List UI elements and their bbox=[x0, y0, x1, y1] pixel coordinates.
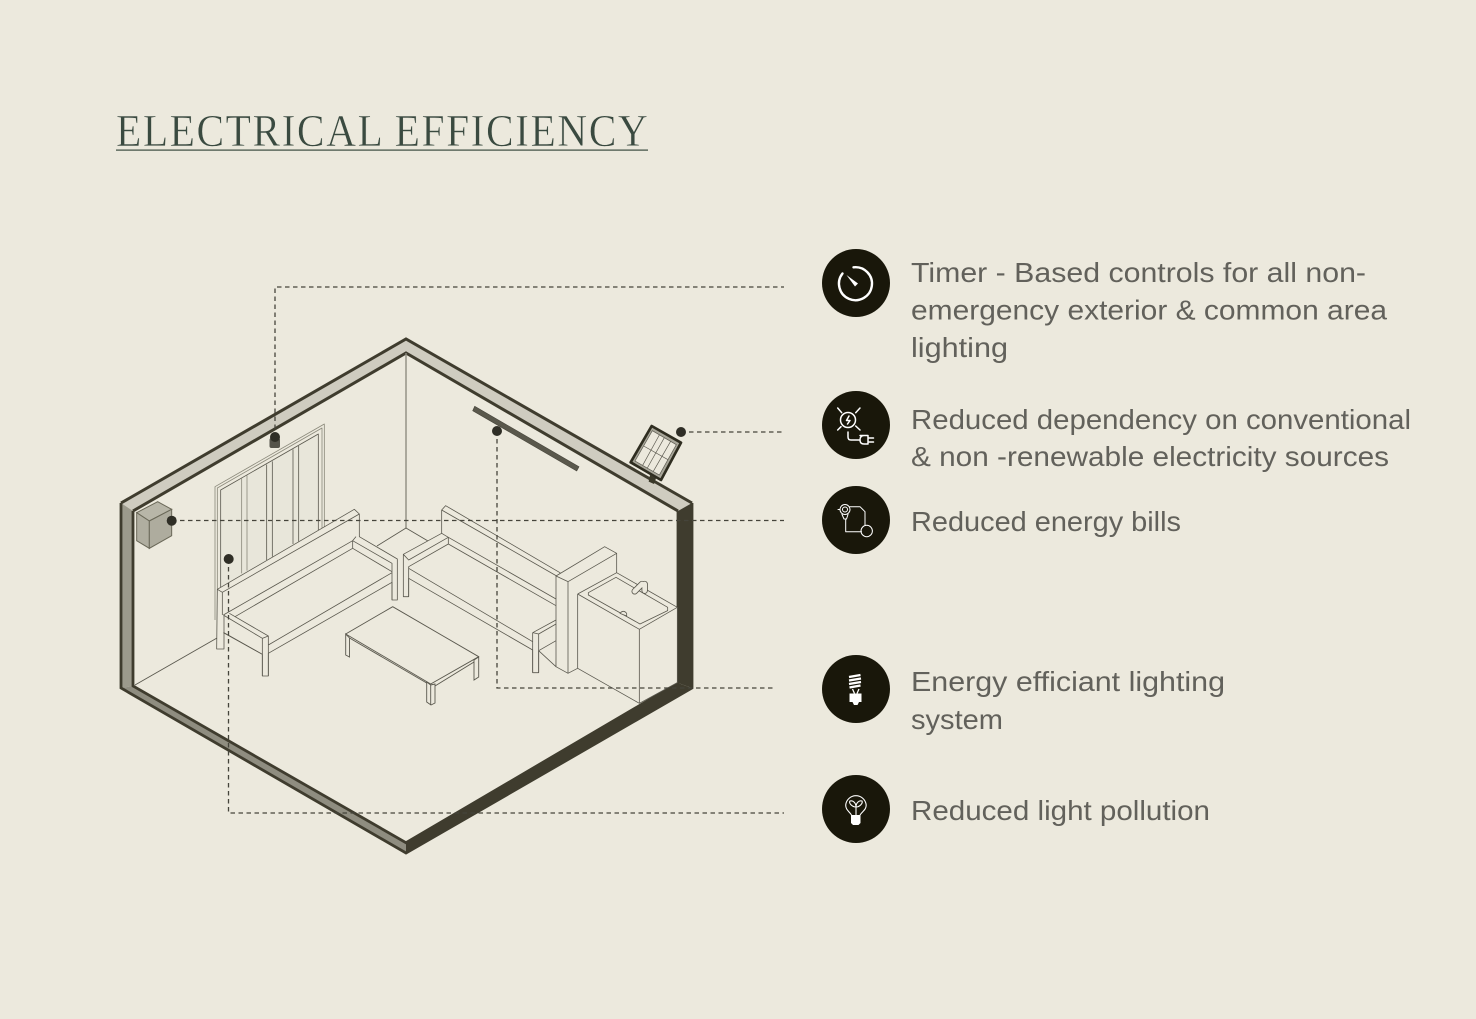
icon: sun and plug bbox=[822, 391, 890, 459]
icon: energy bill bbox=[822, 486, 890, 554]
icon: timer bbox=[822, 249, 890, 317]
kitchen counter with sink bbox=[556, 547, 677, 703]
text: reduced dependency: Reduced dependency on conventional bbox=[911, 404, 1411, 435]
text: timer controls: Timer - Based controls for all non- bbox=[911, 257, 1366, 288]
icon: eco light bulb bbox=[822, 775, 890, 843]
text: timer controls: lighting bbox=[911, 332, 1008, 363]
icon: compact fluorescent bulb bbox=[822, 655, 890, 723]
text: reduced dependency bbox=[911, 404, 1411, 472]
isometric room illustration bbox=[121, 339, 692, 853]
right sofa bbox=[403, 506, 560, 673]
text: lighting system bbox=[911, 666, 1225, 735]
text: timer controls: emergency exterior & common area bbox=[911, 294, 1387, 326]
callout leader lines bbox=[167, 287, 784, 813]
door with glazed panels bbox=[215, 424, 324, 620]
room walls bbox=[121, 339, 692, 853]
text: lighting system: Energy efficiant lighting bbox=[911, 666, 1225, 697]
title: ELECTRICAL EFFICIENCY bbox=[116, 106, 648, 156]
text: reduced light pollution: Reduced light pollution bbox=[911, 795, 1210, 826]
text: timer controls bbox=[911, 257, 1387, 363]
timer device on wall bbox=[270, 438, 280, 448]
electrical box bbox=[137, 502, 172, 548]
text: lighting system: system bbox=[911, 704, 1003, 735]
coffee table bbox=[346, 607, 479, 705]
track light bbox=[473, 406, 579, 471]
left sofa bbox=[217, 509, 397, 676]
text: reduced energy bills: Reduced energy bills bbox=[911, 506, 1181, 537]
solar panel bbox=[631, 426, 681, 484]
text: reduced dependency: & non -renewable electricity sources bbox=[911, 441, 1389, 472]
